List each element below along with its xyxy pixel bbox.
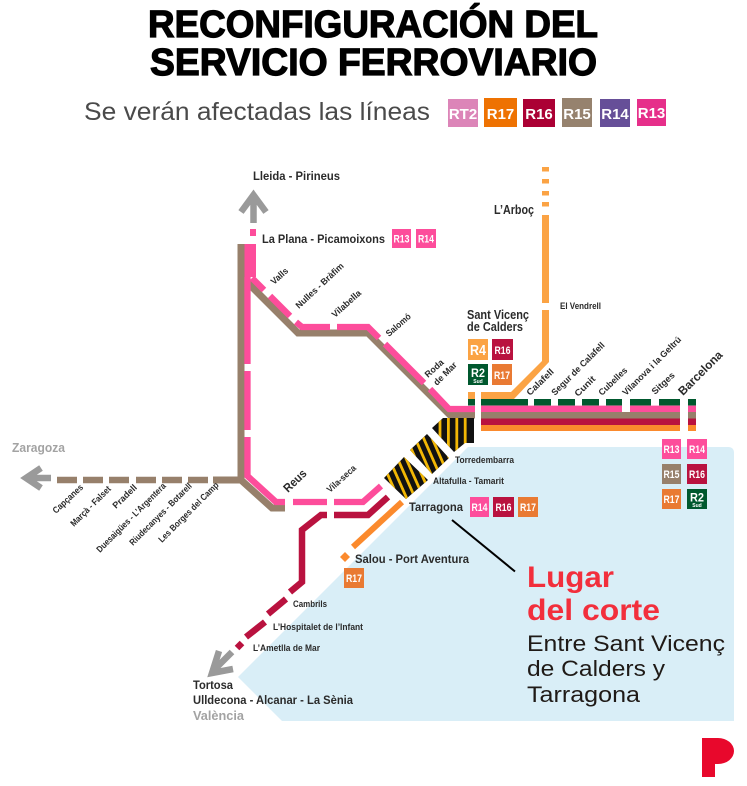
station labels: Zaragoza line: Zaragoza	[12, 440, 66, 455]
legend: affected lines: R16	[525, 106, 553, 123]
station labels: Zaragoza line: Pradell	[110, 482, 139, 510]
station labels: coast line: Tarragona	[409, 500, 463, 514]
legend: affected lines: R17	[487, 106, 514, 123]
badges: La Plana	[392, 229, 436, 248]
station labels: north line	[253, 169, 459, 387]
callout: cut location: del corte	[527, 594, 660, 627]
badge: Salou	[344, 568, 364, 588]
station labels: north line: Nulles - Bràfim	[294, 261, 346, 310]
callout leader line	[452, 520, 515, 572]
station labels: Barcelona line: Barcelona	[675, 348, 726, 398]
title: SERVICIO FERROVIARIO	[150, 42, 597, 84]
arrow: Zaragoza	[26, 468, 51, 488]
callout: cut location: Entre Sant Vicenç	[527, 631, 725, 656]
callout: cut location: Tarragona	[527, 682, 641, 707]
station labels: north line: Vilabella	[330, 287, 364, 319]
badges: Sant Vicenç	[468, 339, 513, 385]
callout: cut location: Lugar	[527, 561, 614, 594]
legend: affected lines	[448, 98, 666, 127]
arrow: Lleida	[241, 195, 266, 223]
station labels: Barcelona line: de Calders	[467, 319, 523, 334]
badges: Tarragona: R17	[520, 502, 536, 514]
station labels: Barcelona line: L’Arboç	[494, 202, 534, 217]
station labels: coast line: València	[193, 708, 245, 723]
badges: Sant Vicenç: Sud	[473, 379, 483, 385]
station labels: Barcelona line: Sant Vicenç	[467, 307, 529, 322]
station labels: coast line	[193, 455, 515, 723]
station labels: north line: Valls	[269, 266, 290, 286]
station labels: Barcelona line: Calafell	[524, 367, 556, 397]
station labels: coast line: Torredembarra	[455, 455, 515, 465]
arrow: Tortosa	[212, 651, 233, 673]
badges: Barcelona: R13	[664, 444, 680, 456]
station labels: coast line: Cambrils	[293, 599, 327, 609]
panel: sea	[238, 447, 734, 721]
station labels: coast line: Salou - Port Aventura	[355, 552, 469, 566]
badges: Barcelona	[662, 439, 707, 509]
station labels: Zaragoza line: Capçanes	[51, 482, 85, 515]
line R15 tan	[57, 244, 696, 508]
station labels: Zaragoza line	[12, 440, 359, 554]
station labels: coast line: L’Hospitalet de l’Infant	[273, 622, 363, 632]
cut section hatching	[379, 415, 474, 500]
badges: Sant Vicenç: R16	[494, 345, 510, 357]
badges: Barcelona: R2	[690, 490, 704, 504]
station labels: north line: Roda	[423, 357, 446, 379]
badges: Barcelona: R14	[689, 444, 706, 456]
subtitle: Se verán afectadas las líneas	[84, 98, 430, 126]
badge: Salou: R17	[346, 573, 362, 585]
station labels: coast line: Altafulla - Tamarit	[433, 476, 504, 486]
badges: Barcelona: R15	[664, 469, 680, 481]
station labels: coast line: Ulldecona - Alcanar - La Sènia	[193, 693, 353, 707]
badges: Sant Vicenç: R4	[470, 342, 487, 359]
callout: cut location	[527, 561, 725, 707]
station labels: coast line: Tortosa	[193, 678, 233, 692]
badges: Barcelona: Sud	[692, 503, 702, 509]
station labels: Zaragoza line: Marçà - Falset	[68, 484, 113, 528]
legend: affected lines: RT2	[449, 106, 477, 123]
station labels: north line: Lleida - Pirineus	[253, 169, 340, 183]
station labels: Barcelona line	[467, 202, 726, 398]
station labels: Barcelona line: Cunit	[572, 374, 597, 398]
station labels: north line: Salomó	[384, 311, 413, 339]
badges: Sant Vicenç: R17	[494, 370, 510, 382]
badges: Barcelona: R16	[689, 469, 705, 481]
title: RECONFIGURACIÓN DEL	[148, 2, 598, 46]
station labels: Barcelona line: Segur de Calafell	[549, 340, 607, 397]
station labels: Zaragoza line: Riudecanyes - Botarell	[127, 481, 194, 547]
callout: cut location: de Calders y	[527, 656, 665, 681]
station labels: Zaragoza line: Duesaigües - L’Argentera	[94, 480, 168, 554]
badges: Tarragona: R14	[472, 502, 488, 514]
station labels: north line: La Plana - Picamoixons	[262, 232, 385, 246]
title	[148, 2, 598, 84]
line R4 light orange	[468, 167, 549, 399]
badges: Tarragona	[470, 497, 538, 517]
station labels: Zaragoza line: Vila-seca	[325, 462, 359, 494]
legend: affected lines: R15	[563, 106, 591, 123]
badges: Barcelona: R17	[664, 494, 680, 506]
line R17 orange	[340, 428, 696, 562]
badges: La Plana: R13	[394, 234, 410, 246]
badges: La Plana: R14	[418, 234, 435, 246]
station labels: Zaragoza line: Les Borges del Camp	[156, 480, 221, 544]
line R2 green	[468, 399, 696, 406]
station labels: north line: de Mar	[431, 359, 459, 387]
station labels: coast line: L’Ametlla de Mar	[253, 643, 320, 653]
station labels: Zaragoza line: Reus	[280, 466, 310, 495]
badges: Tarragona: R16	[496, 502, 512, 514]
station labels: Barcelona line: Sitges	[650, 370, 677, 396]
line R13 R14 pink	[244, 229, 696, 502]
station labels: Barcelona line: Vilanova i la Geltrú	[620, 334, 683, 397]
line R16 crimson	[237, 422, 696, 648]
station labels: Barcelona line: El Vendrell	[560, 301, 601, 311]
badges: Sant Vicenç: R2	[471, 366, 485, 380]
legend: affected lines: R14	[601, 106, 629, 123]
legend: affected lines: R13	[638, 105, 665, 122]
logo	[702, 738, 734, 777]
station labels: Barcelona line: Cubelles	[596, 365, 629, 397]
